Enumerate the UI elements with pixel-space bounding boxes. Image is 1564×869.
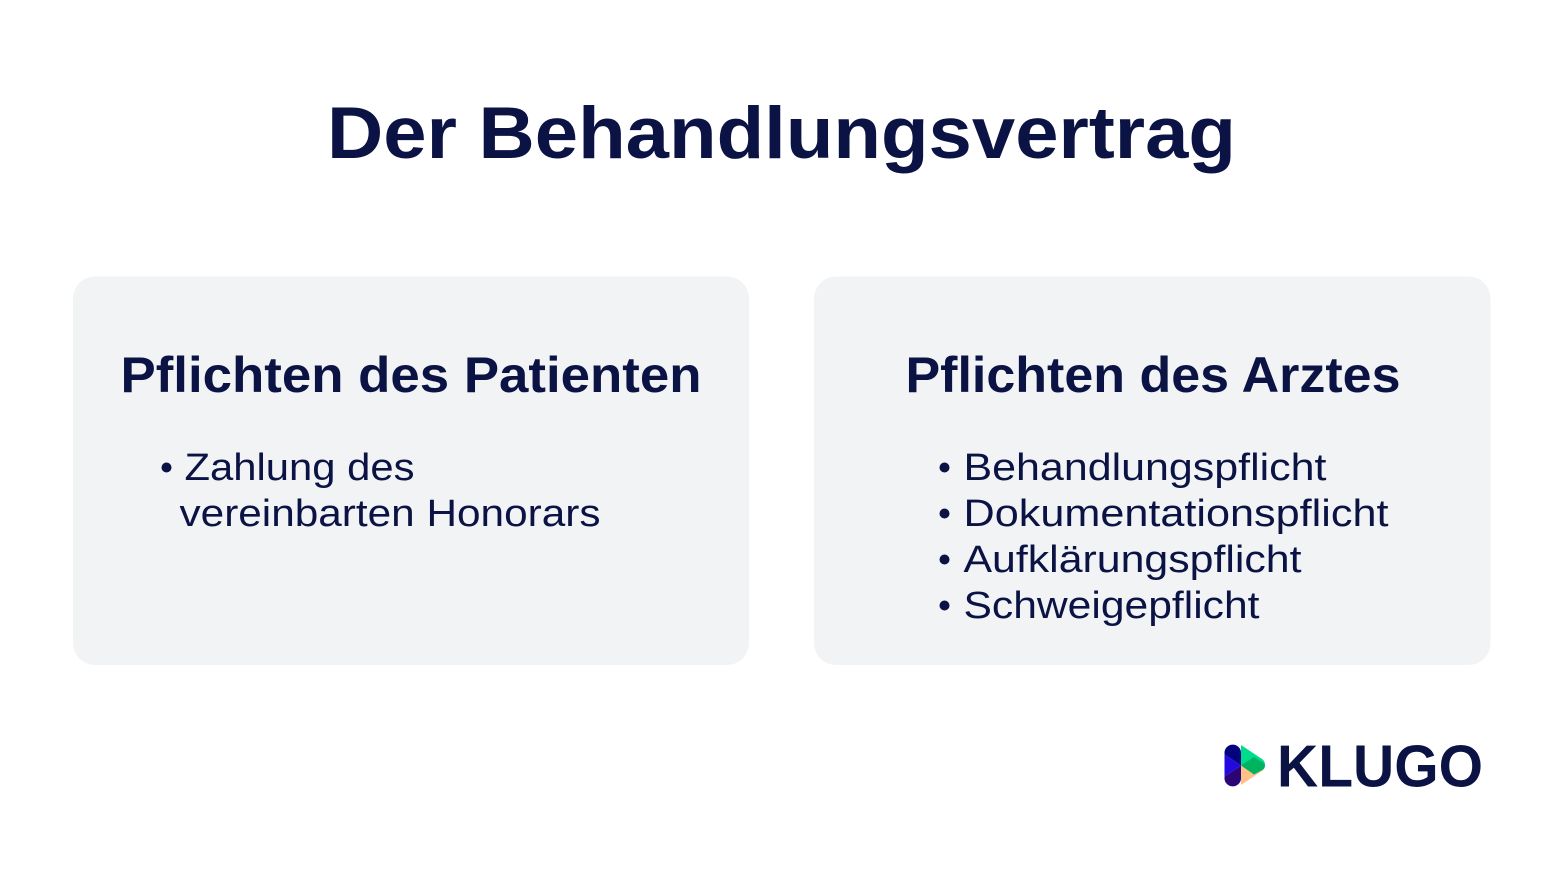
list item: Schweigepflicht: Schweigepflicht bbox=[964, 585, 1260, 627]
icon: play mark bbox=[1224, 745, 1265, 786]
list item bbox=[162, 447, 600, 535]
panel background bbox=[814, 276, 1490, 665]
heading: Pflichten des Patienten bbox=[120, 347, 702, 403]
list item: vereinbarten Honorars bbox=[180, 493, 600, 535]
list item: Aufklärungspflicht: Aufklärungspflicht bbox=[964, 539, 1302, 581]
title: Der Behandlungsvertrag bbox=[327, 93, 1236, 174]
panel background bbox=[73, 276, 749, 665]
list item: Behandlungspflicht: Behandlungspflicht bbox=[964, 447, 1327, 489]
list item: Dokumentationspflicht: Dokumentationspflicht bbox=[964, 493, 1389, 535]
list item: Zahlung des bbox=[184, 447, 414, 489]
heading: Pflichten des Arztes bbox=[906, 347, 1400, 403]
panel: Pflichten des Arztes bbox=[814, 276, 1490, 665]
logo: KLUGO bbox=[1224, 734, 1483, 800]
panel: Pflichten des Patienten bbox=[73, 276, 749, 665]
wordmark: KLUGO bbox=[1277, 734, 1483, 800]
